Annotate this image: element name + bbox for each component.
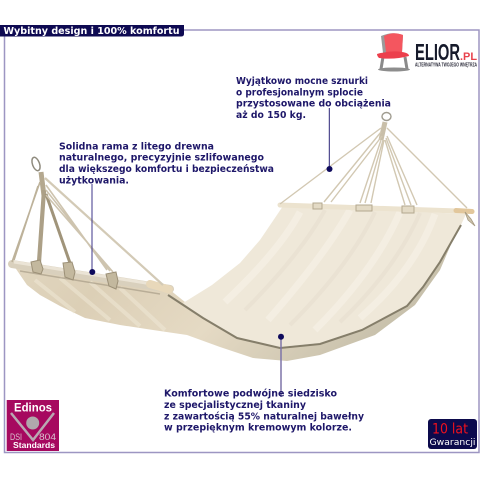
hammock underside (14, 224, 462, 361)
left bar shadow (20, 271, 160, 294)
logo domain: .PL (460, 51, 477, 63)
right ropes (280, 112, 475, 226)
callout: rope text: o profesjonalnym splocie (236, 87, 363, 98)
callout: frame text: naturalnego, precyzyjnie szlifowanego (59, 153, 264, 164)
callout: seat text: Komfortowe podwójne siedzisko (164, 388, 337, 400)
callout: seat text: ze specjalistycznej tkaniny (164, 400, 306, 411)
callout: rope text: Wyjątkowo mocne sznurki (236, 76, 368, 87)
underside folds (35, 278, 165, 330)
badge title: Edinos (14, 400, 52, 414)
warranty label: Gwarancji (430, 438, 476, 448)
badge subtitle: Standards (13, 441, 56, 450)
callout: frame text: Solidna rama z litego drewna (59, 141, 214, 152)
callout: rope text: przystosowane do obciążenia (236, 99, 391, 110)
badge: warranty (428, 419, 477, 449)
logo wordmark: ELIOR (415, 39, 460, 65)
title banner: Wybitny design i 100% komfortu (4, 26, 180, 37)
right spreader bar (280, 205, 472, 212)
logo: Elior (377, 33, 477, 72)
callout: frame text: dla większego komfortu i bezpieczeństwa (59, 163, 274, 175)
callout line: rope (326, 108, 332, 172)
dark hem seam (168, 225, 461, 348)
hammock top surface (183, 206, 466, 347)
warranty years: 10 lat (432, 422, 468, 438)
badge: Edinos standards (7, 400, 59, 451)
icon: red chair (377, 33, 410, 72)
callout line: frame (89, 184, 95, 275)
callout: rope text (236, 76, 391, 121)
left spreader bar (12, 264, 170, 289)
left bar highlight (14, 262, 165, 286)
right bar end (456, 210, 472, 212)
fabric folds (225, 210, 435, 330)
hammock (12, 112, 475, 361)
callout line: seat (278, 334, 284, 397)
badge code: DSI (10, 432, 22, 442)
callout: rope text: aż do 150 kg. (236, 110, 306, 121)
left ropes (12, 156, 163, 289)
callout: seat text (164, 388, 364, 434)
callout: frame text (59, 141, 274, 186)
callout: frame text: użytkowania. (59, 175, 129, 186)
left bar end (150, 284, 169, 290)
callout: seat text: w przepięknym kremowym kolorze. (164, 423, 352, 434)
badge emblem (11, 413, 54, 440)
badge: Edinos standards: 804 (39, 432, 56, 442)
callout: seat text: z zawartością 55% naturalnej bawełny (164, 410, 364, 422)
